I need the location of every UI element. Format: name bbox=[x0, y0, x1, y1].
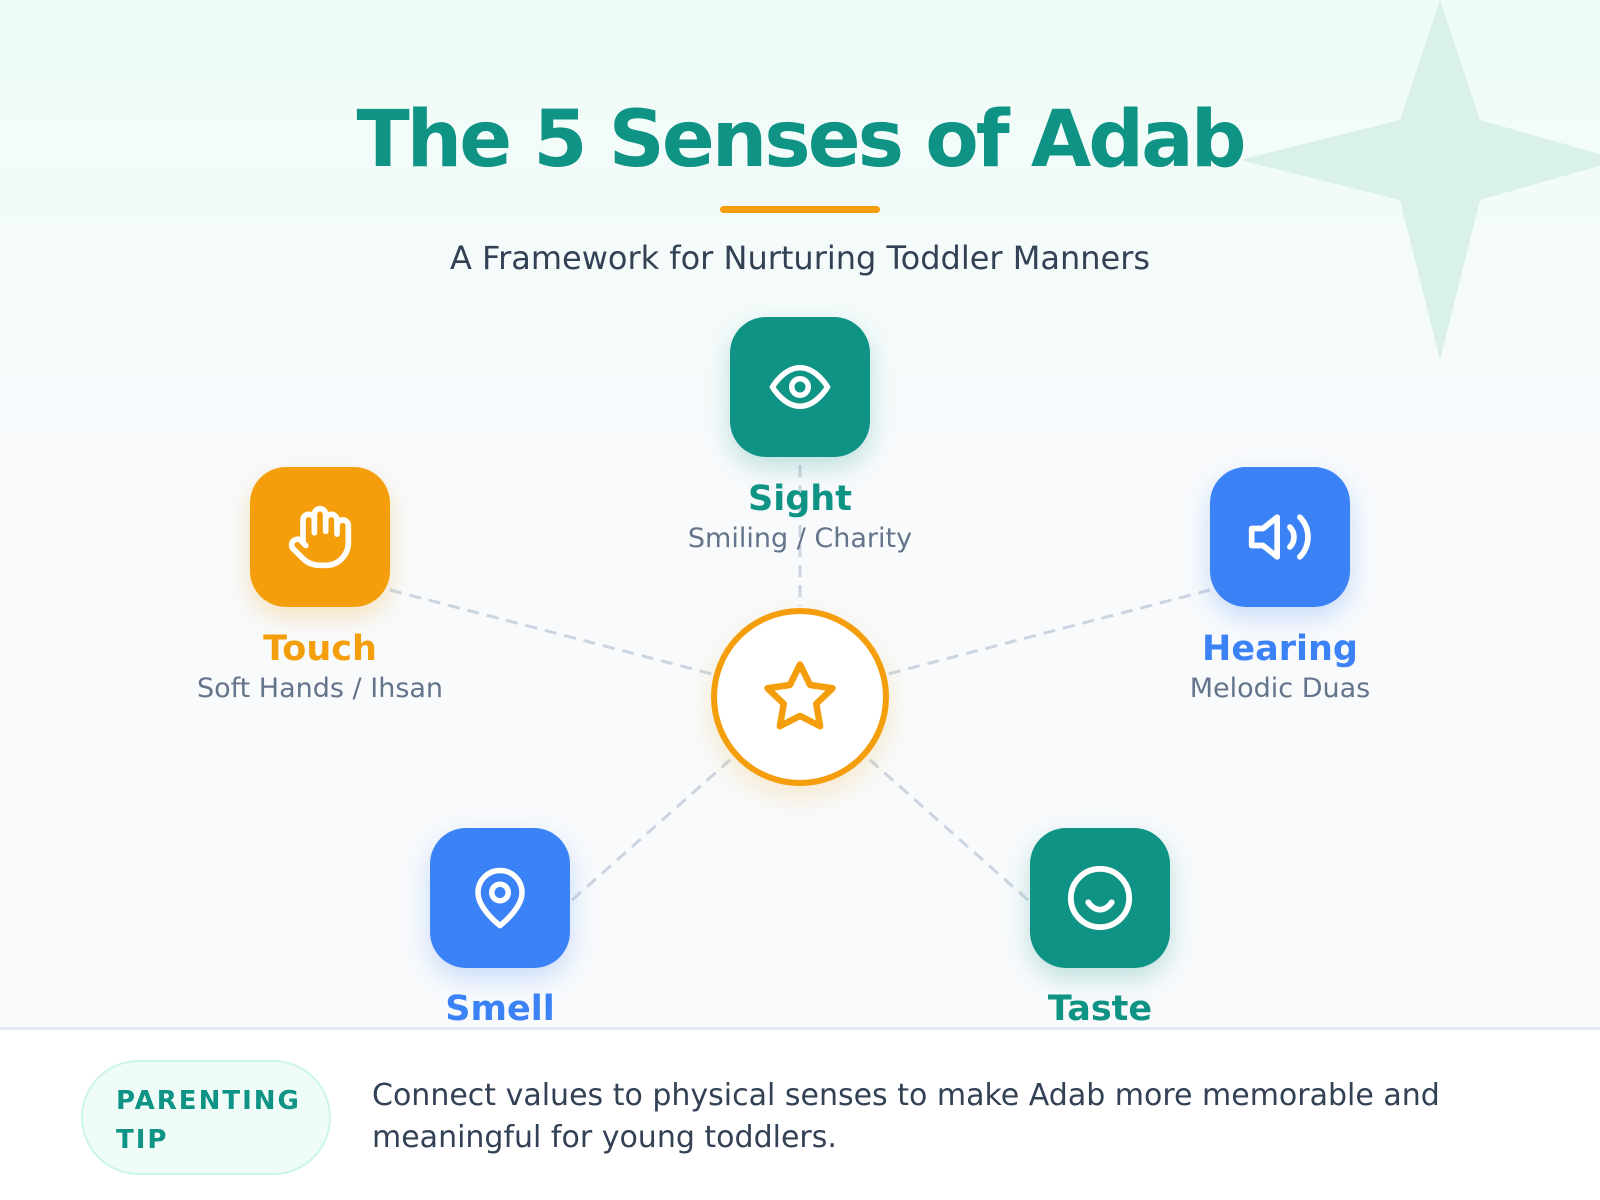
center star circle bbox=[711, 608, 889, 786]
label: taste: Taste bbox=[1048, 989, 1152, 1029]
parenting tip badge bbox=[81, 1060, 331, 1175]
sub: hearing: Melodic Duas bbox=[1190, 673, 1370, 704]
icon: taste smile bbox=[1030, 828, 1170, 968]
label: hearing: Hearing bbox=[1202, 629, 1358, 669]
tip text: Connect values to physical senses to make Adab more memorable and meaningful for young toddlers. bbox=[372, 1078, 1440, 1155]
title: The 5 Senses of Adab bbox=[356, 95, 1244, 185]
parenting tip badge: TIP bbox=[116, 1125, 168, 1155]
icon: touch hand bbox=[250, 467, 390, 607]
label: touch: Touch bbox=[263, 629, 377, 669]
sub: touch: Soft Hands / Ihsan bbox=[197, 673, 443, 704]
icon: smell pin bbox=[430, 828, 570, 968]
label: smell: Smell bbox=[445, 989, 555, 1029]
icon: sight eye bbox=[730, 317, 870, 457]
title underline bbox=[720, 206, 880, 213]
subtitle: A Framework for Nurturing Toddler Manners bbox=[450, 239, 1150, 277]
icon: hearing speaker bbox=[1210, 467, 1350, 607]
parenting tip badge: PARENTING bbox=[116, 1086, 301, 1116]
label: sight: Sight bbox=[748, 479, 852, 519]
sub: sight: Smiling / Charity bbox=[688, 523, 912, 554]
